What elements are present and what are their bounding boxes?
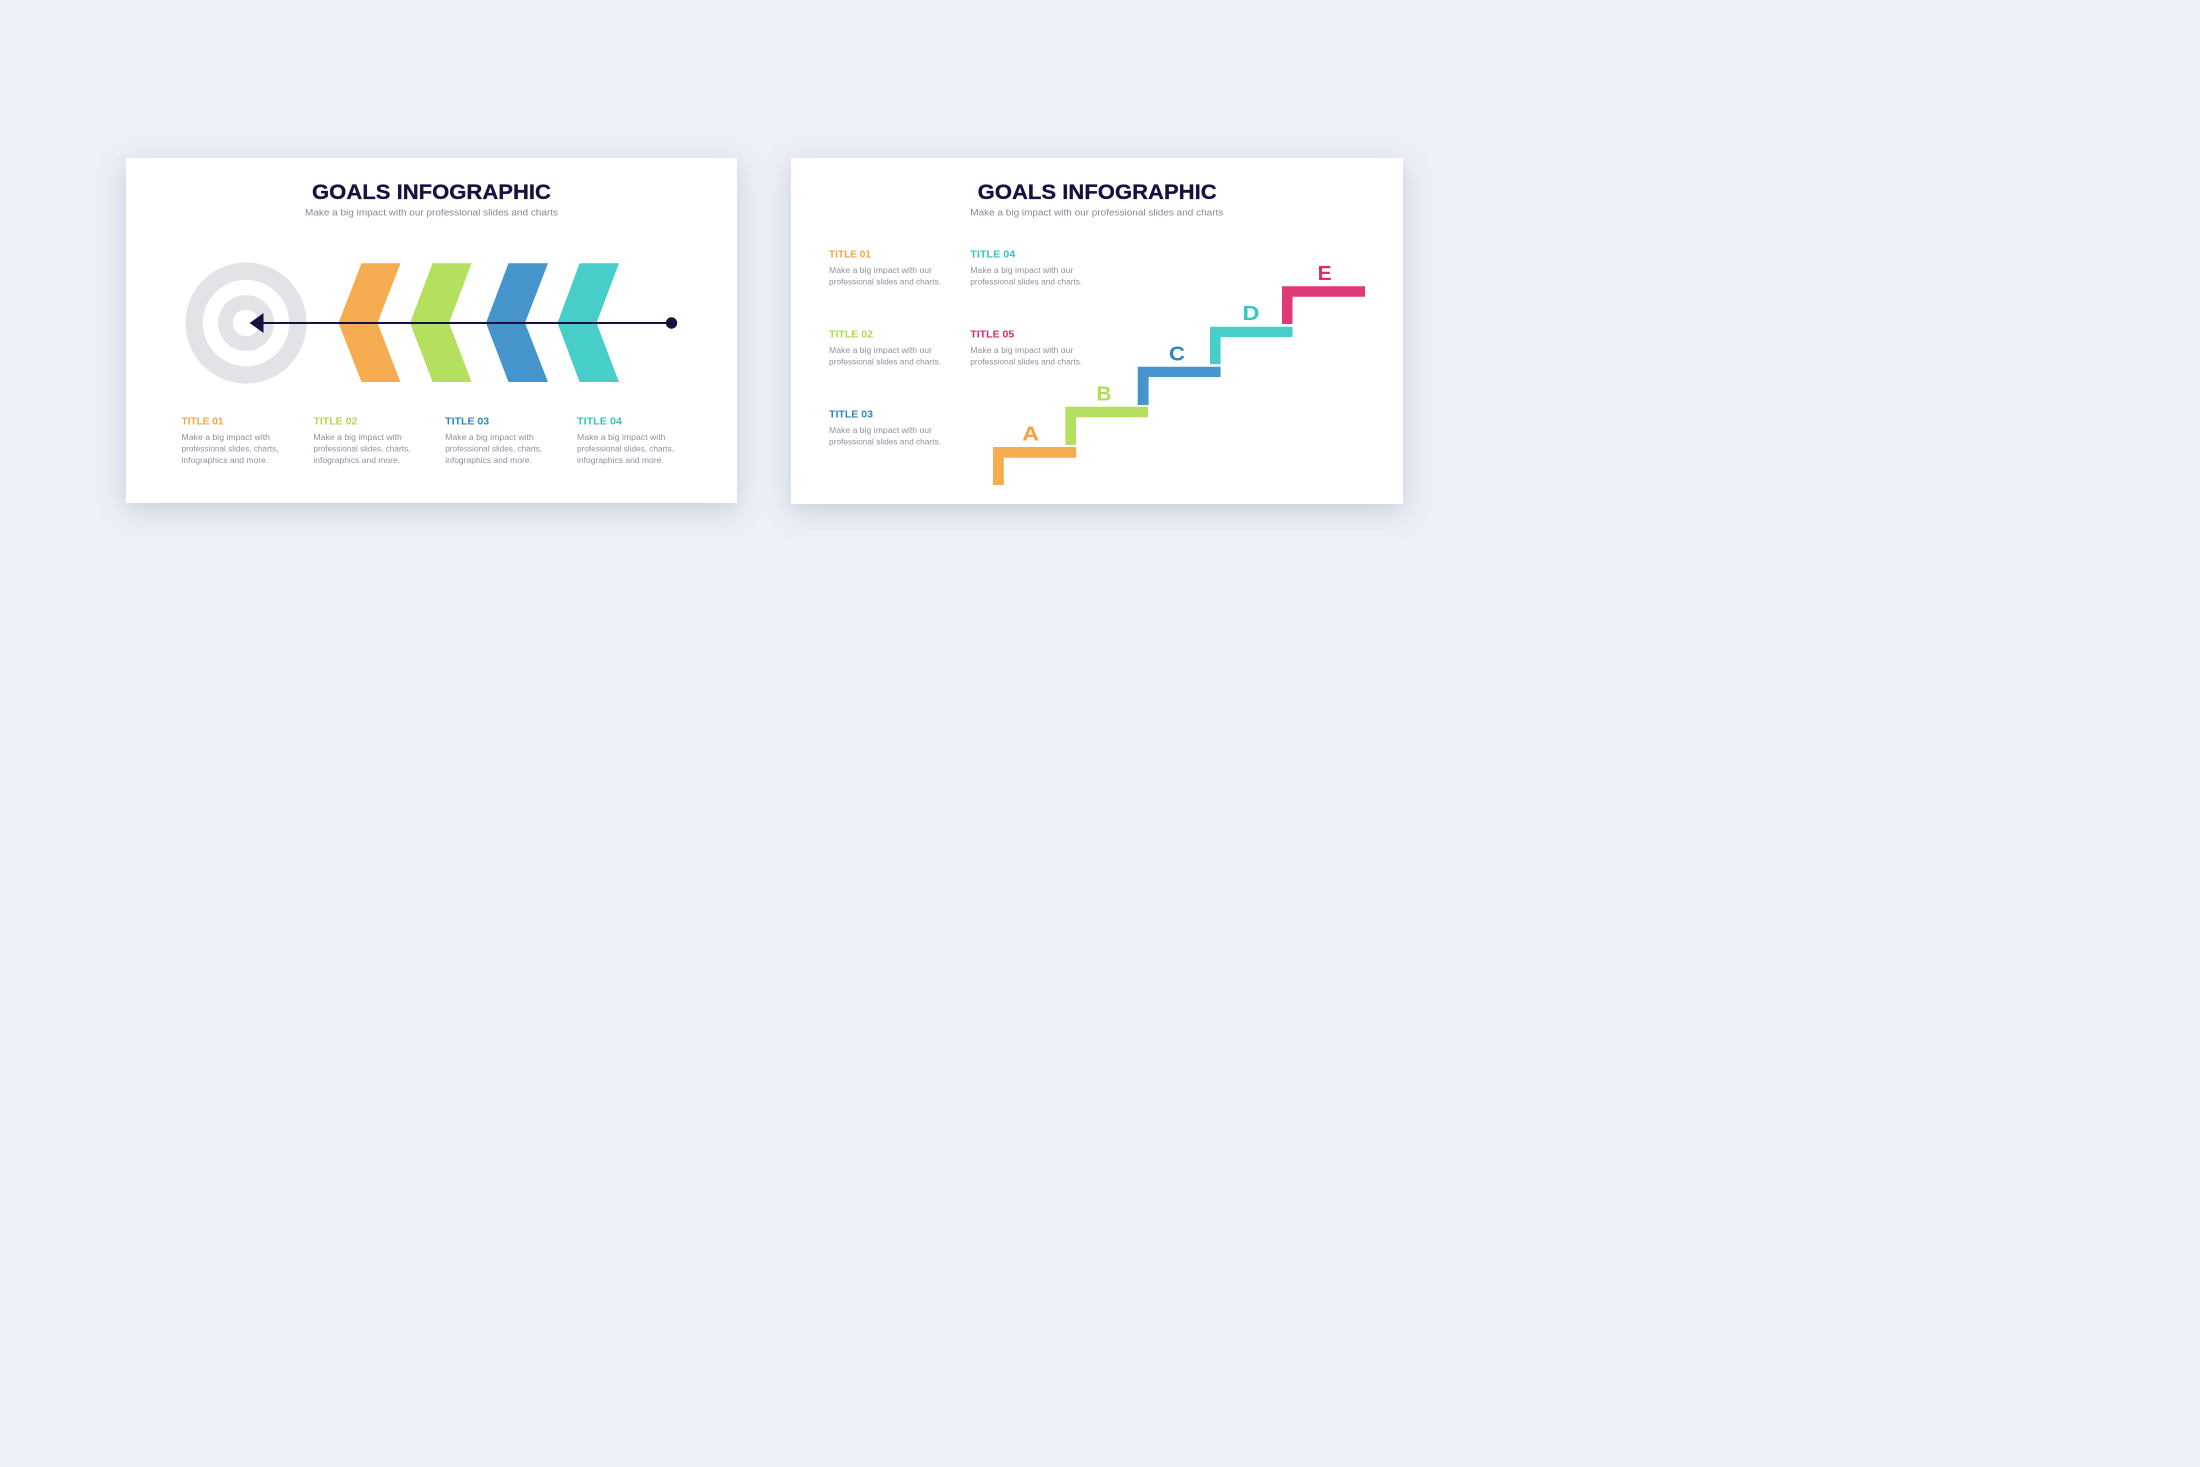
step D: D [1242, 303, 1260, 325]
step D [1210, 303, 1292, 364]
text block: title 02: TITLE 02 [313, 416, 358, 428]
text block: title 01 [829, 250, 941, 286]
text block: title 03: infographics and more. [445, 455, 532, 465]
text block: title 02: Make a big impact with [313, 432, 402, 442]
text block: title 02: TITLE 02 [829, 329, 873, 340]
text block: title 03: professional slides, charts, [445, 444, 542, 454]
text block: title 04: TITLE 04 [577, 416, 622, 428]
text block: title 04: Make a big impact with our [970, 265, 1073, 275]
chevron: blue [486, 263, 548, 382]
text block: title 03: TITLE 03 [829, 409, 873, 420]
step E: E [1318, 263, 1332, 285]
text block: title 05: TITLE 05 [970, 329, 1015, 340]
heading: GOALS INFOGRAPHIC [312, 181, 551, 204]
step B [1065, 383, 1148, 445]
text block: title 02: professional slides, charts, [313, 444, 410, 454]
text block: title 04: TITLE 04 [970, 250, 1016, 260]
text block: title 01: infographics and more. [182, 455, 268, 465]
chevron: green [410, 263, 472, 382]
text block: title 01: TITLE 01 [829, 250, 871, 260]
text block: title 03 [445, 416, 542, 465]
text block: title 04 [577, 416, 674, 465]
text block: title 04: professional slides and charts. [970, 276, 1082, 286]
text block: title 04 [970, 250, 1082, 286]
text block: title 04: infographics and more. [577, 455, 664, 465]
text block: title 03: Make a big impact with our [829, 425, 932, 435]
step A: A [1022, 424, 1039, 446]
icon: target [185, 262, 307, 384]
text block: title 05: Make a big impact with our [970, 345, 1073, 355]
text block: title 04: Make a big impact with [577, 432, 666, 442]
step E [1282, 263, 1365, 324]
text block: title 01: Make a big impact with [182, 432, 270, 442]
text block: title 04: professional slides, charts, [577, 444, 674, 454]
step A [993, 424, 1076, 485]
chevron: teal [558, 263, 619, 382]
text block: title 01: professional slides, charts, [182, 444, 278, 454]
text block: title 03: professional slides and charts. [829, 436, 941, 446]
panel background [791, 158, 1403, 504]
heading: GOALS INFOGRAPHIC [978, 181, 1217, 204]
step C: C [1169, 343, 1185, 365]
text block: title 03: TITLE 03 [445, 416, 490, 428]
text block: title 03 [829, 409, 941, 446]
chevron: orange [338, 263, 400, 382]
step B: B [1096, 383, 1112, 405]
text block: title 01: professional slides and charts. [829, 276, 941, 286]
text block: title 02: professional slides and charts. [829, 356, 941, 366]
panel background [126, 158, 737, 503]
text block: title 03: Make a big impact with [445, 432, 534, 442]
subheading: Make a big impact with our professional slides and charts [305, 208, 558, 218]
text block: title 05: professional slides and charts. [970, 356, 1082, 366]
text block: title 01: Make a big impact with our [829, 265, 932, 275]
step C [1138, 343, 1221, 405]
subheading: Make a big impact with our professional slides and charts [970, 208, 1223, 218]
text block: title 02: infographics and more. [313, 455, 400, 465]
text block: title 01: TITLE 01 [182, 416, 224, 428]
arrow pointing to target [250, 313, 677, 333]
text block: title 02 [829, 329, 941, 366]
text block: title 05 [970, 329, 1082, 366]
text block: title 02: Make a big impact with our [829, 345, 932, 355]
text block: title 02 [313, 416, 410, 465]
panel: staircase goal slide [791, 158, 1403, 504]
text block: title 01 [182, 416, 278, 465]
panel: chevron goal slide [126, 158, 737, 503]
